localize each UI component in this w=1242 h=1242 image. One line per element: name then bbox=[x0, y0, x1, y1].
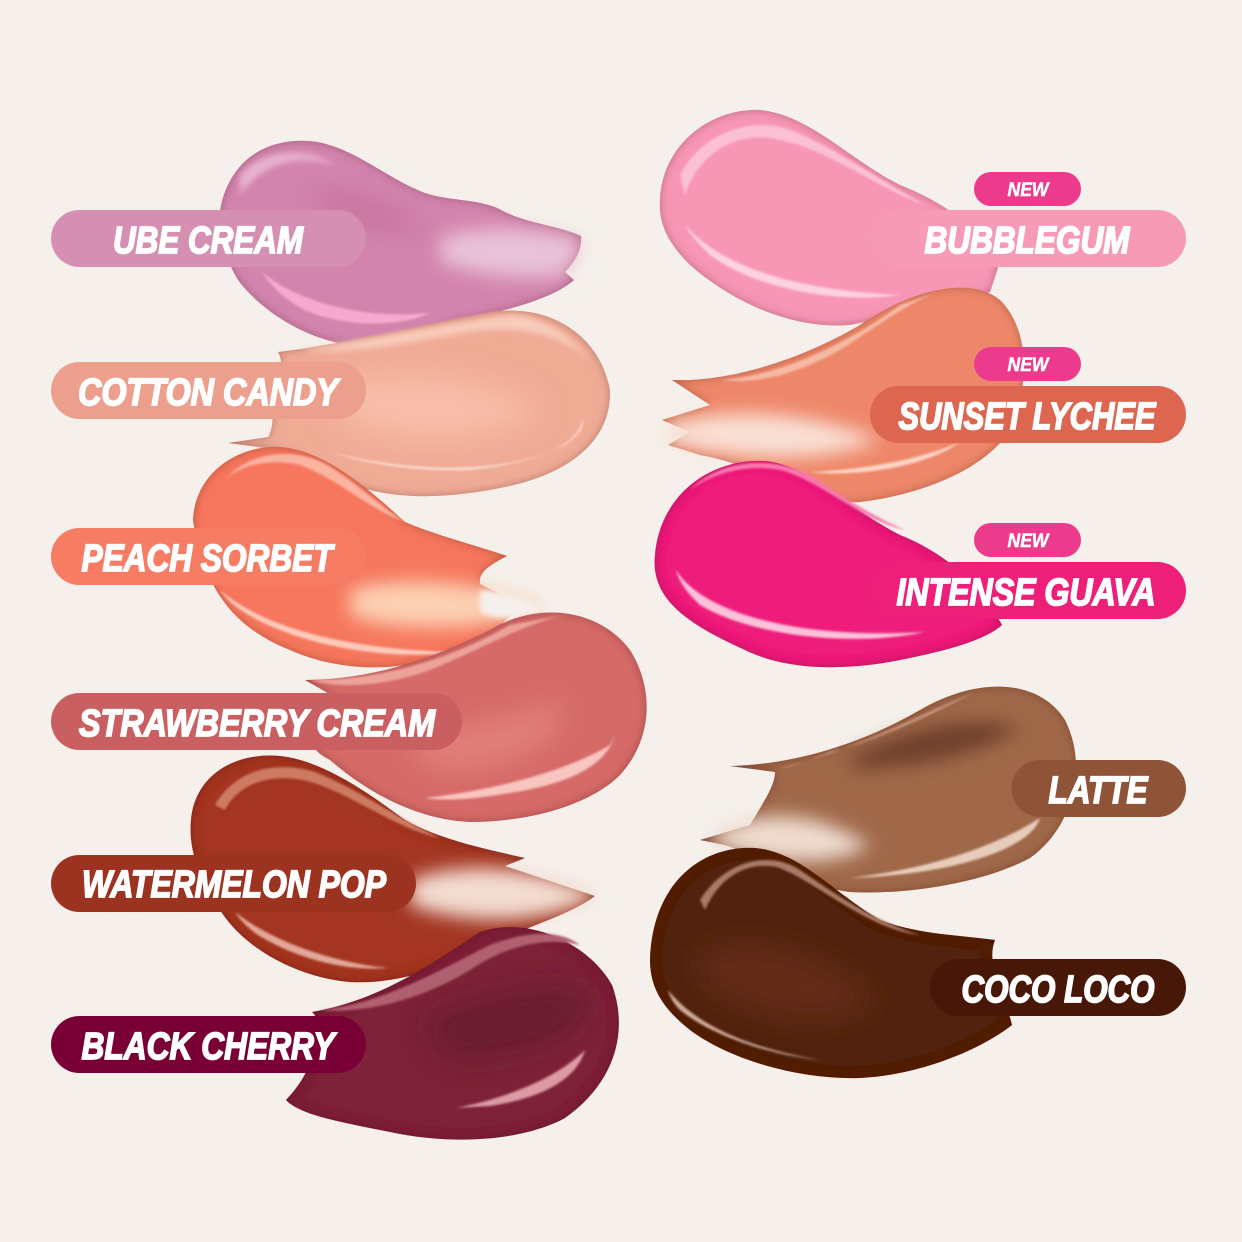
badge: new (sunset lychee) bbox=[974, 347, 1081, 381]
badge: new (intense guava): NEW bbox=[1008, 531, 1050, 552]
swatch: bubblegum bbox=[660, 110, 998, 326]
label: peach sorbet bbox=[51, 528, 366, 585]
label: cotton candy: COTTON CANDY bbox=[78, 372, 341, 414]
swatch: ube cream bbox=[220, 141, 581, 345]
label: cotton candy bbox=[51, 362, 366, 419]
swatch: cotton candy bbox=[228, 310, 610, 496]
swatch: latte bbox=[700, 687, 1076, 893]
label: black cherry: BLACK CHERRY bbox=[82, 1026, 338, 1068]
swatch: intense guava bbox=[655, 461, 1002, 667]
label: bubblegum bbox=[870, 210, 1186, 267]
swatch: coco loco bbox=[650, 848, 1012, 1078]
label: coco loco: COCO LOCO bbox=[962, 969, 1154, 1011]
label: black cherry bbox=[51, 1016, 366, 1073]
label: watermelon pop bbox=[51, 855, 416, 912]
swatch: strawberry cream bbox=[305, 613, 647, 822]
badge: new (sunset lychee): NEW bbox=[1008, 355, 1050, 376]
swatch: black cherry bbox=[286, 927, 619, 1140]
swatch: watermelon pop bbox=[191, 756, 600, 982]
badge: new (intense guava) bbox=[974, 523, 1081, 557]
label: sunset lychee: SUNSET LYCHEE bbox=[898, 396, 1157, 438]
swatch: sunset lychee bbox=[662, 288, 1024, 502]
label: latte: LATTE bbox=[1048, 770, 1149, 812]
label: latte bbox=[1012, 760, 1186, 817]
label: ube cream bbox=[51, 210, 366, 267]
label: intense guava: INTENSE GUAVA bbox=[896, 572, 1156, 614]
swatch: peach sorbet bbox=[193, 447, 545, 667]
badge: new (bubblegum): NEW bbox=[1008, 180, 1050, 201]
badge: new (bubblegum) bbox=[974, 172, 1081, 206]
label: watermelon pop: WATERMELON POP bbox=[82, 864, 387, 906]
label: coco loco bbox=[930, 959, 1186, 1016]
label: bubblegum: BUBBLEGUM bbox=[924, 220, 1131, 262]
label: ube cream: UBE CREAM bbox=[113, 220, 304, 262]
label: intense guava bbox=[870, 562, 1186, 619]
label: sunset lychee bbox=[870, 386, 1186, 443]
label: strawberry cream bbox=[51, 693, 462, 750]
label: peach sorbet: PEACH SORBET bbox=[82, 538, 335, 580]
label: strawberry cream: STRAWBERRY CREAM bbox=[79, 703, 436, 745]
